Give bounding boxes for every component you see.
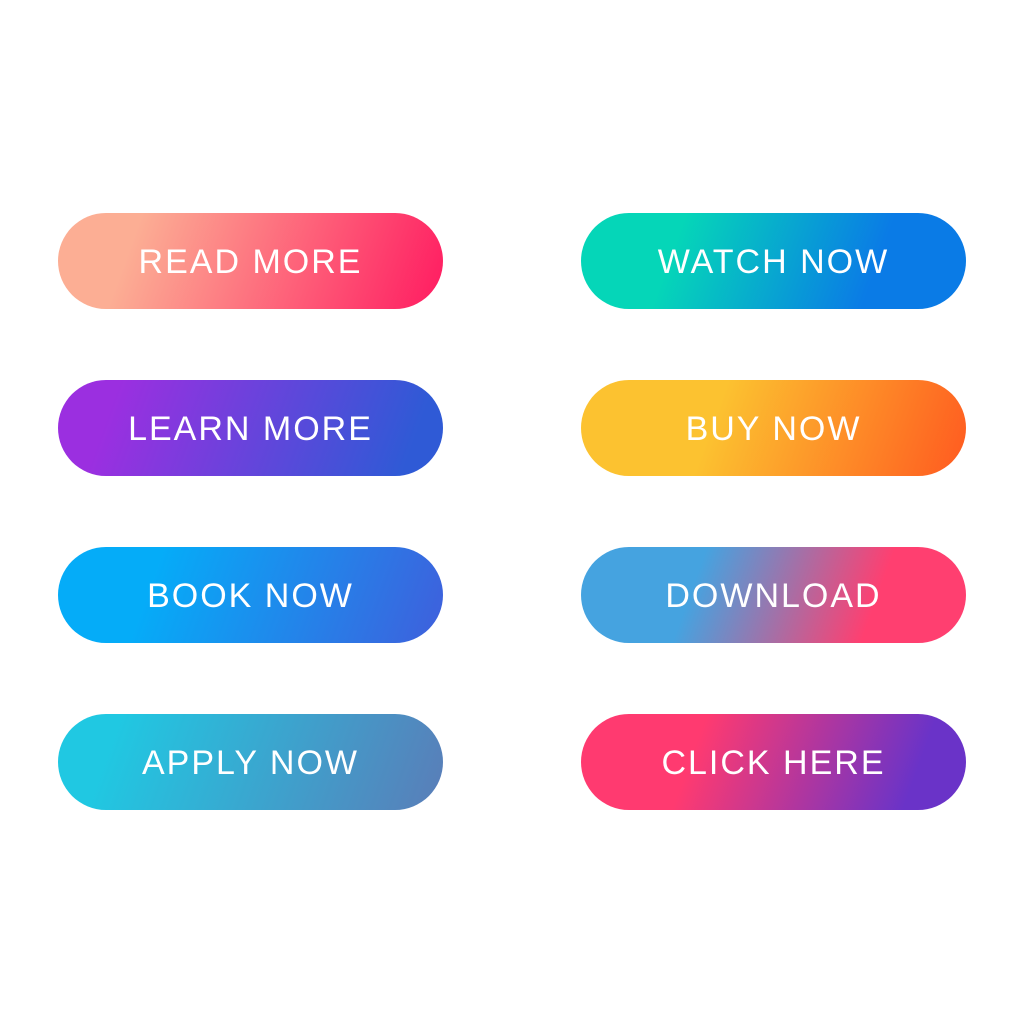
button: read more: [58, 213, 443, 309]
button: buy now: BUY NOW: [686, 410, 861, 448]
button: buy now: [581, 380, 966, 476]
button: watch now: [581, 213, 966, 309]
button: read more: READ MORE: [139, 243, 362, 281]
button: click here: CLICK HERE: [661, 744, 886, 782]
button: apply now: APPLY NOW: [142, 744, 359, 782]
button: click here: [581, 714, 966, 810]
button: learn more: [58, 380, 443, 476]
button: watch now: WATCH NOW: [658, 243, 889, 281]
button: book now: [58, 547, 443, 643]
button: learn more: LEARN MORE: [128, 410, 373, 448]
button: download: DOWNLOAD: [665, 577, 882, 615]
button: apply now: [58, 714, 443, 810]
button: book now: BOOK NOW: [147, 577, 354, 615]
button: download: [581, 547, 966, 643]
